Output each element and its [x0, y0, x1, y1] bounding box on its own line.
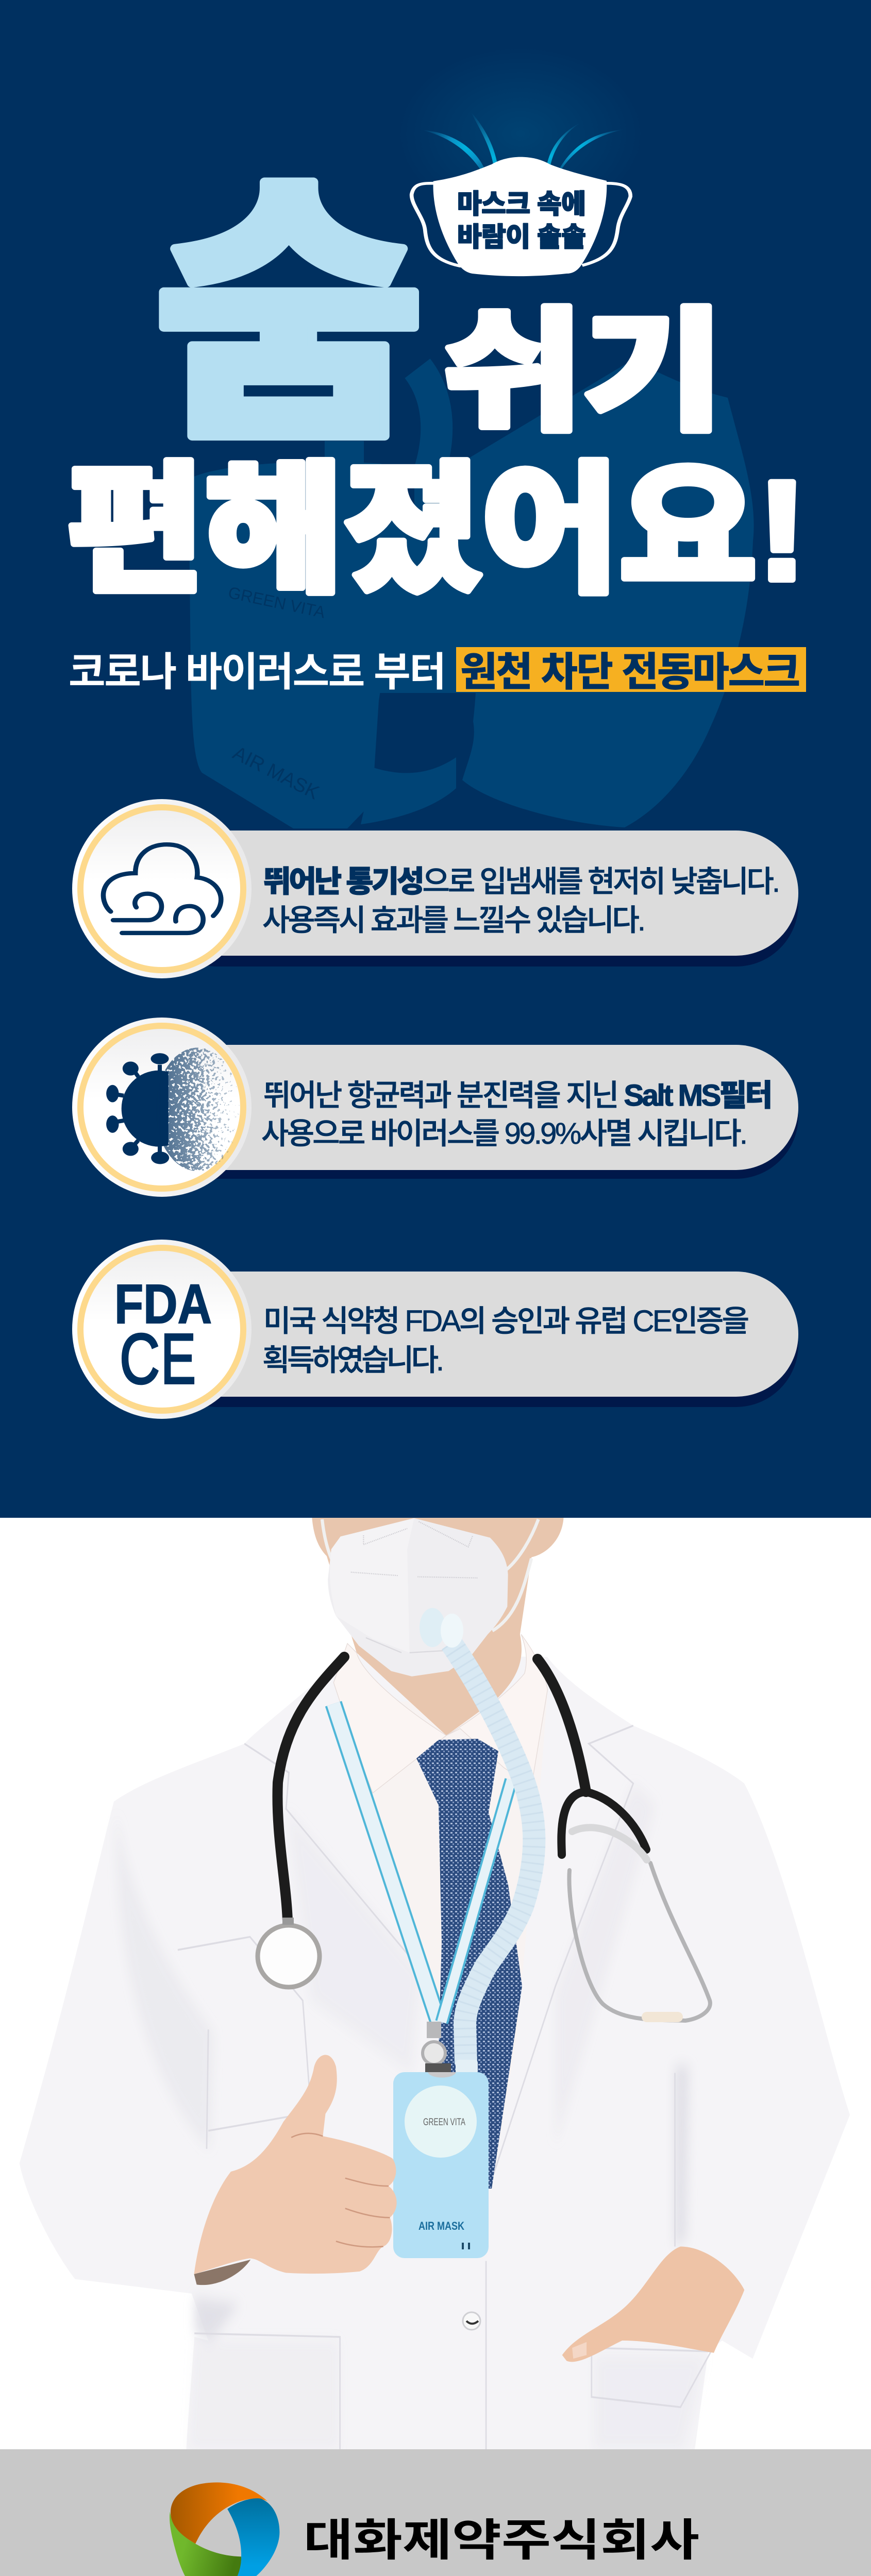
- mask shape: [412, 157, 630, 276]
- icon: cloud and wind: [103, 844, 221, 933]
- stethoscope: [258, 1657, 710, 2021]
- ghost product image in background: GREEN VITA: [227, 583, 327, 622]
- title: line one: 쉬기: [442, 298, 723, 447]
- text: antibacterial: [261, 1079, 773, 1150]
- icon: FDA and CE marks: FDA: [114, 1273, 212, 1335]
- icon: FDA and CE marks: C: [120, 1319, 160, 1399]
- text: antibacterial: 뛰어난 항균력과 분진력을 지닌 Salt MS필터: [263, 1079, 773, 1112]
- shirt panel: [494, 2168, 495, 2176]
- surgical mask: [322, 1518, 539, 1676]
- device: air mask: [393, 2072, 489, 2258]
- airflow streaks: [423, 112, 624, 171]
- panel: certification: [72, 1240, 798, 1419]
- icon: mask with airflow and caption: [397, 46, 644, 276]
- white photo area: [0, 1518, 871, 2449]
- thumbs up hand: [194, 2055, 397, 2285]
- panel: antibacterial: [72, 1018, 798, 1197]
- ghost product image in background: [189, 363, 754, 828]
- logo mark: [170, 2482, 279, 2576]
- text: ventilation: [262, 865, 780, 937]
- hand in pocket: [562, 2246, 744, 2362]
- text: certification: [262, 1304, 749, 1377]
- ghost product image in background: AIR MASK: [229, 742, 323, 804]
- footer bar: [0, 2449, 871, 2576]
- panel: ventilation: [72, 799, 798, 978]
- icon: FDA and CE marks: [114, 1273, 212, 1399]
- text: antibacterial: 사용으로 바이러스를 99.9%사멸 시킵니다.: [261, 1117, 748, 1150]
- title: line two: 편해졌어요!: [66, 452, 807, 610]
- highlight bar: 원천 차단 전동마스크: [460, 649, 800, 694]
- shirt collar: [333, 1634, 547, 1793]
- text: ventilation: 사용즉시 효과를 느낄수 있습니다.: [262, 904, 646, 937]
- lanyard: [333, 1704, 511, 2073]
- necktie: [407, 1739, 522, 2189]
- icon: dissolving virus: [106, 1047, 240, 1171]
- device: air mask: AIR MASK: [418, 2219, 464, 2232]
- company name: 대화제약주식회사: [304, 2516, 699, 2565]
- doctor illustration: [20, 1515, 850, 2453]
- title: [66, 162, 807, 610]
- text: ventilation: 뛰어난 통기성으로 입냄새를 현저히 낮춥니다.: [263, 865, 780, 899]
- device: air mask: GREEN VITA: [423, 2117, 465, 2128]
- text: certification: 미국 식약청 FDA의 승인과 유럽 CE인증을: [263, 1304, 749, 1338]
- mask caption: [457, 190, 586, 252]
- subtitle: [69, 647, 806, 694]
- white coat: [20, 1655, 850, 2453]
- icon: FDA and CE marks: E: [161, 1319, 196, 1399]
- subtitle: 코로나 바이러스로 부터: [69, 649, 446, 694]
- skin: face and neck: [312, 1515, 564, 1736]
- mask caption: 마스크 속에: [457, 190, 586, 219]
- navy header background: [0, 0, 871, 1518]
- breathing tube: [420, 1608, 534, 2074]
- mask caption: 바람이 솔솔: [457, 223, 586, 252]
- title: big syllable: 숨: [154, 162, 425, 471]
- text: certification: 획득하였습니다.: [262, 1344, 444, 1377]
- coat button: [463, 2312, 480, 2330]
